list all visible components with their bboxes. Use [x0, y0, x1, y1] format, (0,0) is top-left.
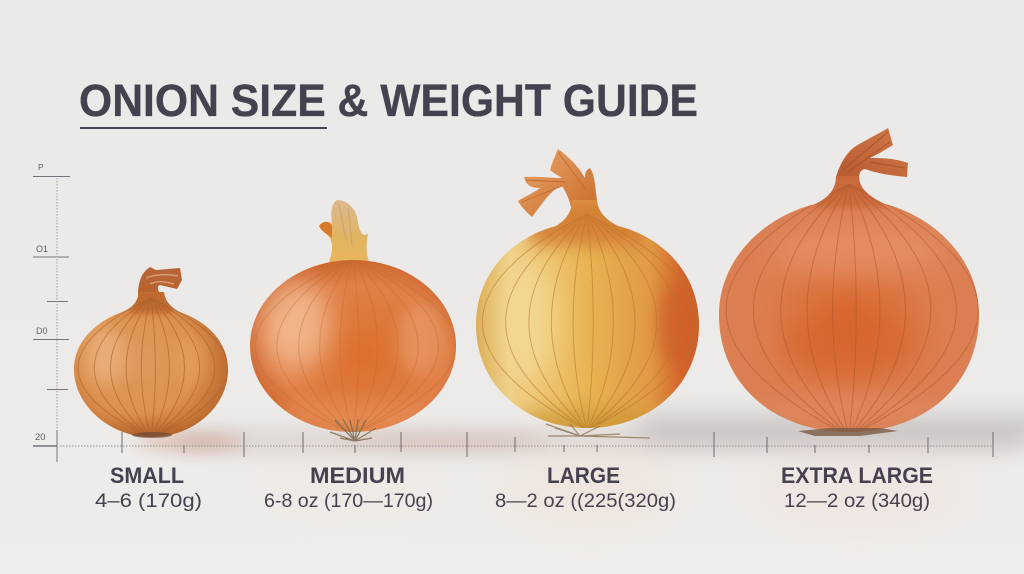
weight: medium: 6-8 oz (170—170g) [264, 490, 433, 512]
label: small [95, 463, 202, 512]
weight: extra large: 12—2 oz (340g) [784, 490, 930, 512]
axis label D0: D0 [36, 326, 48, 336]
onion: large [476, 149, 702, 441]
size axis [33, 162, 70, 462]
onion: extra large [719, 128, 979, 436]
onion: medium [250, 200, 456, 441]
label: medium: MEDIUM [310, 463, 405, 488]
label: large [495, 463, 676, 512]
axis label 01: O1 [36, 244, 48, 254]
weight: large: 8—2 oz ((225(320g) [495, 490, 676, 512]
floor shadow band [135, 414, 1024, 530]
root tuft: medium [330, 419, 376, 441]
infographic canvas [33, 84, 1024, 511]
axis label P: P [38, 162, 44, 172]
label: extra large [781, 463, 933, 512]
root tuft: extra large [798, 428, 898, 436]
label: large: LARGE [547, 463, 620, 488]
root tuft: large [546, 424, 650, 438]
onion: small [74, 267, 228, 454]
title: ONION SIZE & WEIGHT GUIDE [79, 75, 698, 126]
baseline ruler [60, 432, 993, 457]
label: small: SMALL [110, 463, 184, 488]
title underline [80, 127, 327, 129]
label: extra large: EXTRA LARGE [781, 463, 933, 488]
axis label 20: 20 [35, 432, 46, 443]
weight: small: 4–6 (170g) [95, 490, 202, 512]
label: medium [264, 463, 433, 512]
